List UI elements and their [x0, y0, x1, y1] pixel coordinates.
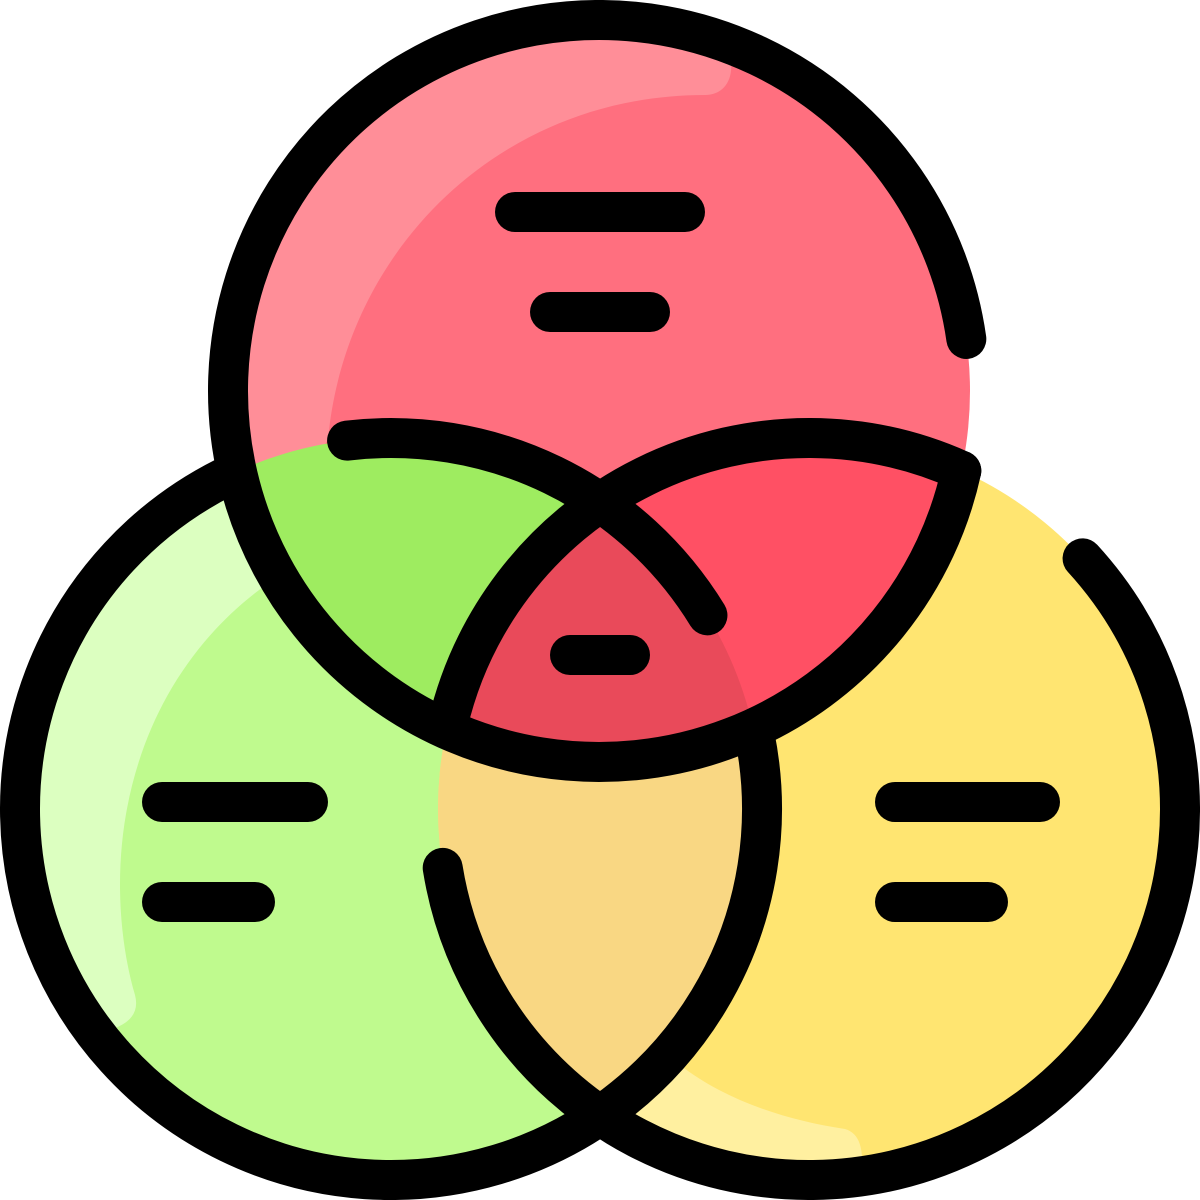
panel: top red circle — [248, 40, 970, 478]
text lines: right circle — [895, 802, 1040, 902]
panel: left green circle — [40, 500, 564, 1160]
text line: center — [570, 635, 630, 675]
overlap: top and left — [256, 444, 564, 700]
overlap: left and right — [438, 750, 742, 1091]
overlap: top and right — [636, 458, 938, 709]
panel: right yellow circle — [438, 480, 1160, 1160]
text lines: top circle — [515, 212, 685, 312]
text lines: left circle — [162, 802, 308, 902]
overlap: all three — [470, 527, 748, 742]
